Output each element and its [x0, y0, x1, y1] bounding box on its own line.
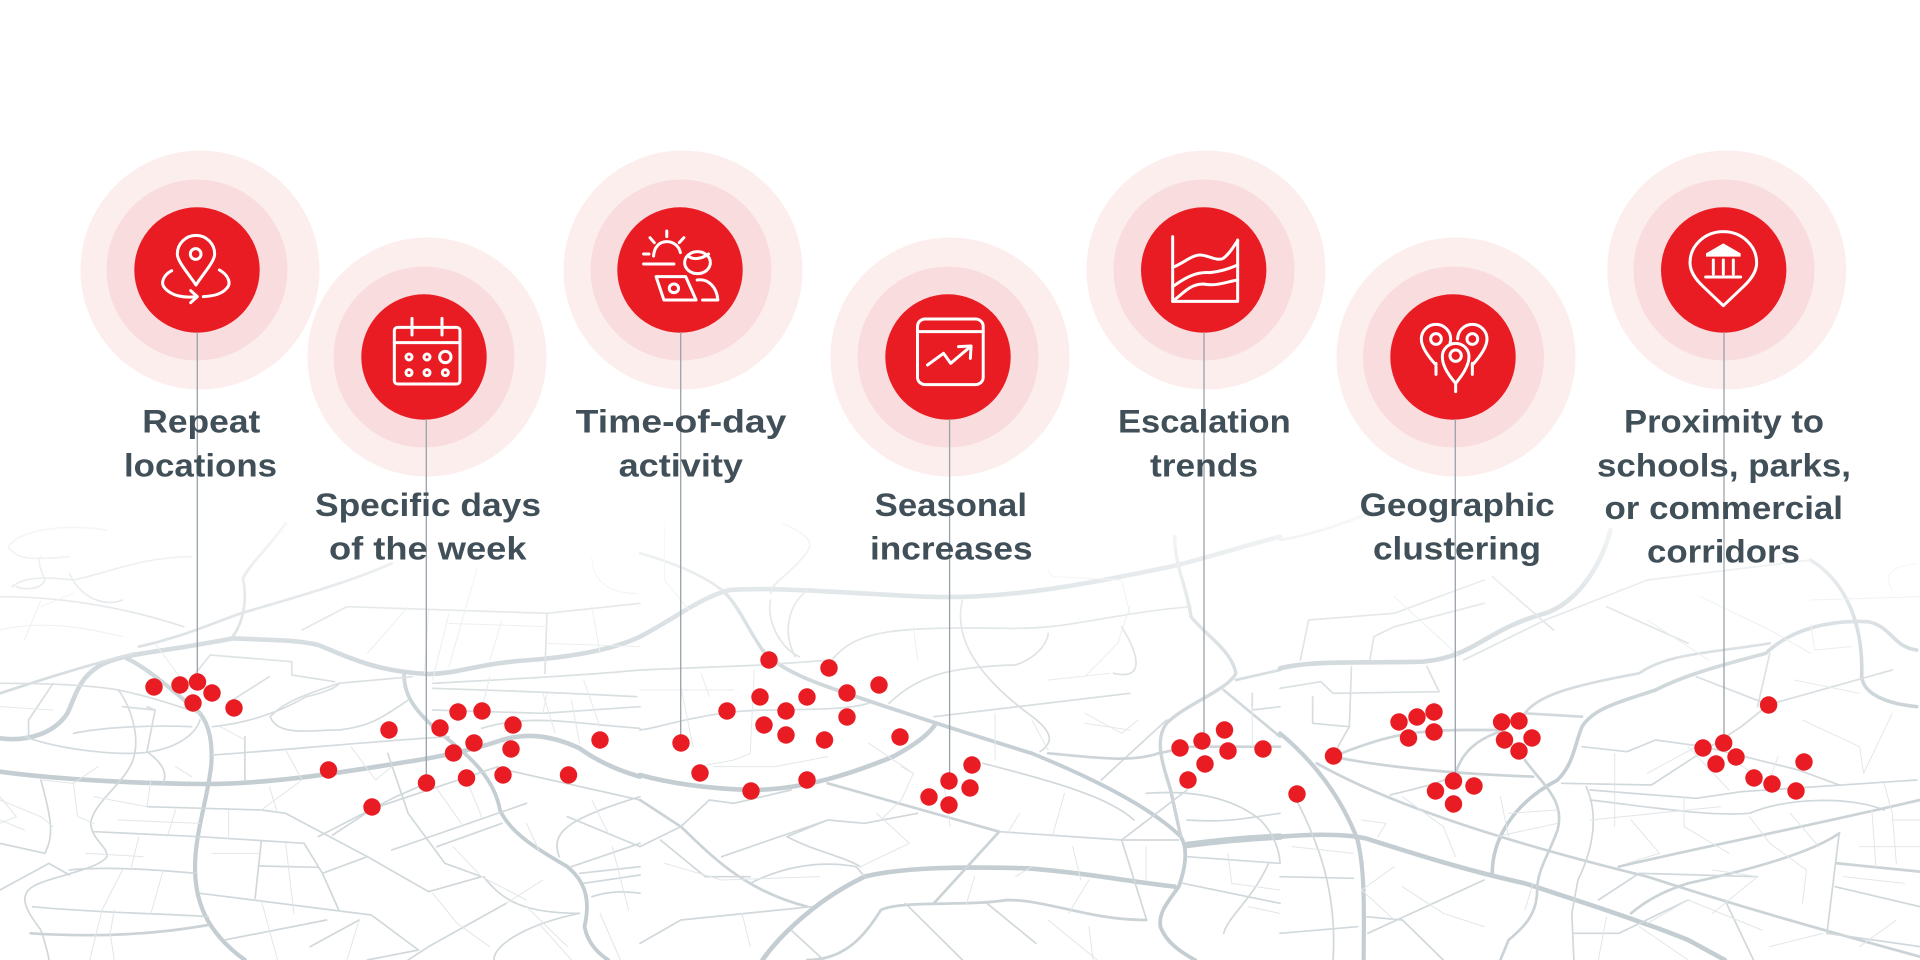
label — [1360, 487, 1555, 566]
leader line — [196, 332, 198, 682]
label — [315, 487, 541, 566]
item: proximity to schools, parks, or commercial corridors — [1597, 150, 1851, 743]
label: Escalation — [1118, 404, 1291, 440]
leader line — [1723, 332, 1725, 743]
pulse rings — [830, 238, 1070, 476]
label: Time-of-day — [576, 404, 787, 440]
label: Geographic — [1360, 487, 1555, 523]
pulse rings — [564, 150, 802, 390]
incident dots on map — [145, 651, 1813, 816]
label — [870, 487, 1033, 566]
item: escalation trends — [1086, 150, 1326, 741]
label — [124, 404, 277, 484]
label — [576, 404, 787, 484]
leader line — [1454, 419, 1456, 781]
label: increases — [870, 530, 1033, 566]
leader line — [1203, 332, 1205, 741]
street map background — [0, 500, 1920, 960]
item: repeat locations — [80, 150, 320, 682]
item: time-of-day activity — [564, 150, 802, 743]
item: geographic clustering — [1336, 238, 1576, 781]
icon: pin with civic building — [1690, 232, 1757, 306]
icon: three map pins — [1421, 324, 1487, 392]
label: corridors — [1647, 534, 1800, 570]
label: trends — [1150, 448, 1258, 484]
icon: calendar — [394, 318, 460, 384]
icon: stacked area chart — [1173, 237, 1238, 301]
label: Seasonal — [875, 487, 1027, 523]
icon: window with upward trend — [917, 319, 983, 385]
label: or commercial — [1604, 490, 1843, 526]
item: specific days of the week — [308, 238, 546, 783]
icon: sun and person with laptop — [644, 231, 718, 300]
pulse rings — [1607, 150, 1846, 390]
label: locations — [124, 448, 277, 484]
label: Specific days — [315, 487, 541, 523]
leader line — [680, 332, 682, 743]
label: clustering — [1373, 530, 1541, 566]
label — [1118, 404, 1291, 484]
leader line — [949, 419, 951, 781]
label: activity — [619, 448, 743, 484]
label — [1597, 404, 1851, 570]
leader line — [425, 419, 427, 783]
label: Repeat — [142, 404, 261, 440]
label: of the week — [329, 530, 527, 566]
pulse rings — [308, 238, 546, 476]
pulse rings — [1086, 150, 1326, 390]
icon: pin with orbit arrow — [163, 235, 229, 303]
label: schools, parks, — [1597, 448, 1851, 484]
label: Proximity to — [1624, 404, 1824, 440]
pulse rings — [1336, 238, 1576, 476]
pulse rings — [80, 150, 320, 390]
item: seasonal increases — [830, 238, 1070, 781]
